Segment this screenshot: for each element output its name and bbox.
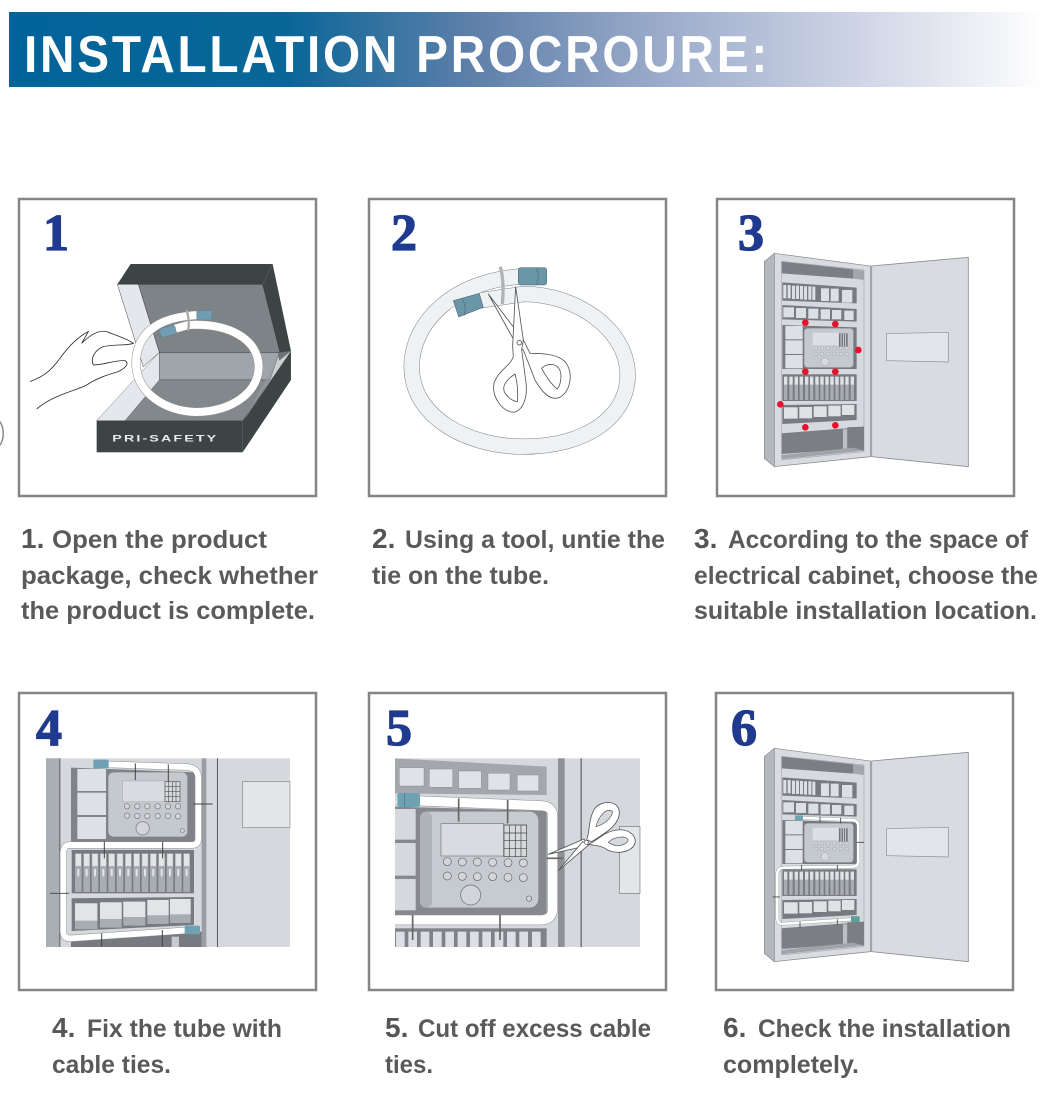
illustration: cabinet with installed tube bbox=[764, 748, 968, 962]
step 5 caption line 2: ties. bbox=[385, 1051, 433, 1079]
panel: step 3 cabinet locations bbox=[717, 199, 1014, 496]
title banner: INSTALLATION PROCROURE: bbox=[24, 26, 770, 84]
step number 5: 5 bbox=[386, 700, 412, 757]
step 2 caption: 2. bbox=[372, 523, 395, 554]
step 5 caption: 5. bbox=[385, 1012, 408, 1043]
step 3 caption line 3: suitable installation location. bbox=[694, 597, 1037, 625]
step number 1: 1 bbox=[43, 205, 69, 262]
step 5 caption: Cut off excess cable bbox=[418, 1015, 651, 1043]
step 1 caption: 1. bbox=[21, 523, 44, 554]
step 3 caption: According to the space of bbox=[728, 526, 1029, 554]
step 4 caption: Fix the tube with bbox=[87, 1015, 282, 1043]
step 6 caption: Check the installation bbox=[758, 1015, 1011, 1043]
step number 4: 4 bbox=[36, 700, 62, 757]
title banner bbox=[9, 12, 1044, 87]
panel: step 5 cut ties bbox=[369, 693, 666, 990]
step 2 caption: Using a tool, untie the bbox=[405, 526, 665, 554]
illustration: open product box with hand bbox=[30, 264, 291, 452]
step 6 caption line 2: completely. bbox=[723, 1051, 859, 1079]
step number 2: 2 bbox=[391, 205, 417, 262]
step 2 caption line 2: tie on the tube. bbox=[372, 562, 549, 590]
panel: step 4 fix tube bbox=[19, 693, 316, 990]
step 3 caption: 3. bbox=[694, 523, 717, 554]
panel: step 6 check installation bbox=[716, 693, 1013, 990]
step 1 caption: Open the product bbox=[52, 526, 268, 554]
stray edge mark bbox=[0, 420, 3, 447]
illustration: close-up with scissors cutting tie bbox=[395, 758, 640, 947]
step number 6: 6 bbox=[731, 700, 757, 757]
step 4 caption line 2: cable ties. bbox=[52, 1051, 171, 1079]
panel: step 1 open box bbox=[19, 199, 316, 496]
illustration: tube and scissors bbox=[412, 267, 628, 447]
box brand label: PRI-SAFETY bbox=[112, 434, 218, 444]
step 4 caption: 4. bbox=[52, 1012, 75, 1043]
illustration: close-up with tube and ties bbox=[46, 758, 290, 947]
panel: step 2 untie tube bbox=[369, 199, 666, 496]
step number 3: 3 bbox=[738, 205, 764, 262]
step 1 caption line 2: package, check whether bbox=[21, 562, 318, 590]
step 1 caption line 3: the product is complete. bbox=[21, 597, 315, 625]
step 6 caption: 6. bbox=[723, 1012, 746, 1043]
illustration: cabinet with red markers bbox=[764, 253, 968, 467]
step 3 caption line 2: electrical cabinet, choose the bbox=[694, 562, 1038, 590]
